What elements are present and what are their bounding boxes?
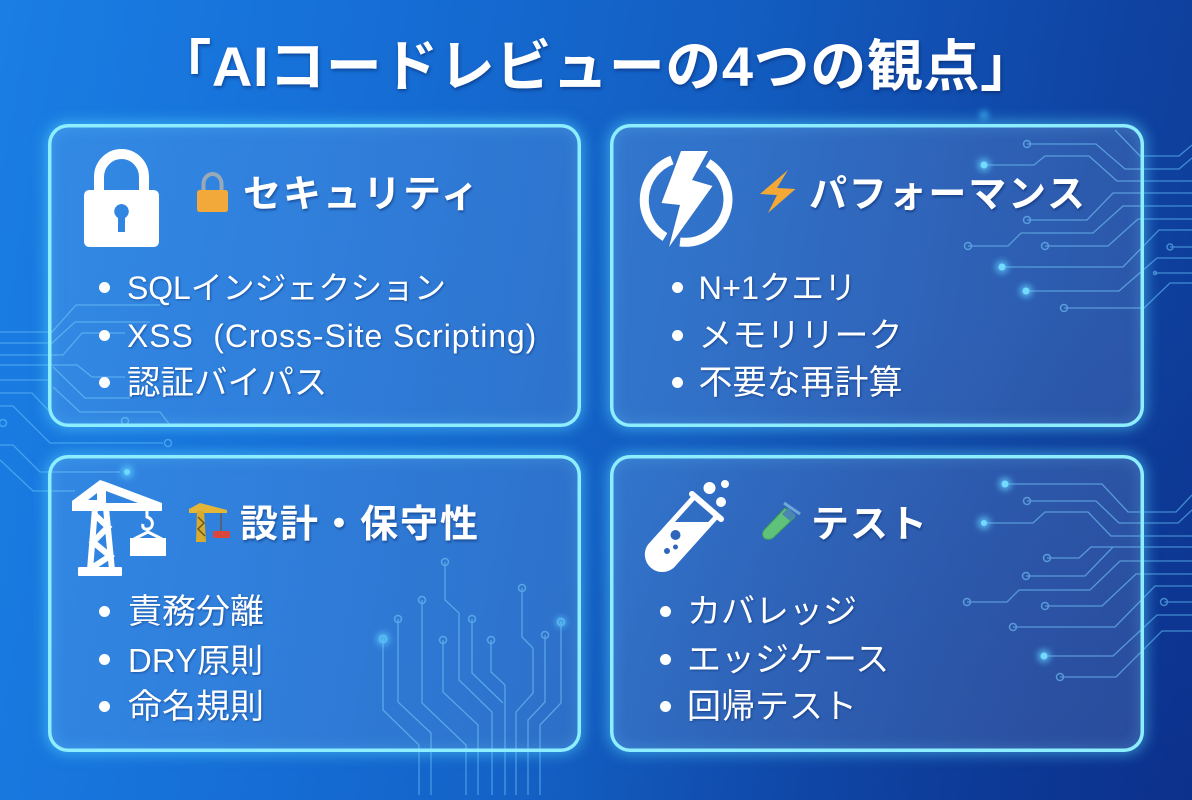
bullet list: performance: N+1クエリ [698,270,857,306]
bullet list: testing: カバレッジ [687,593,857,631]
bullet list: testing: 回帰テスト [687,688,857,726]
bullet list: design and maintainability: 命名規則 [128,688,264,726]
icon: white lightning in ring [640,151,732,247]
bullet list: performance: メモリリーク [698,316,902,354]
icon: white test tube [644,480,729,572]
icon: small green test tube [762,502,801,540]
heading: testing: テスト [811,504,928,546]
bullet list: security: SQLインジェクション [127,270,446,306]
bullet list: performance [672,270,902,402]
icon: white padlock [84,149,159,247]
panel: performance [610,124,1144,427]
bullet list: design and maintainability: DRY原則 [128,642,263,678]
bullet list: security [99,270,537,402]
title: 「AIコードレビューの4つの観点」 [155,35,1037,98]
icon: small orange padlock [197,172,228,212]
heading: security: セキュリティ [243,174,481,216]
bullet list: security: 認証バイパス [127,365,327,402]
panel: testing [610,455,1144,752]
panel: security [48,124,581,427]
icon: white crane [72,480,166,576]
bullet list: design and maintainability [99,593,264,726]
heading: performance: パフォーマンス [809,174,1087,216]
heading: design and maintainability: 設計・保守性 [240,504,480,546]
panel: design and maintainability [48,455,581,752]
bullet list: design and maintainability: 責務分離 [128,593,264,631]
bullet list: testing [660,593,889,726]
bullet list: testing: エッジケース [687,640,889,678]
icon: small orange lightning [760,170,796,213]
bullet list: performance: 不要な再計算 [698,364,902,402]
icon: small yellow crane [189,503,230,542]
bullet list: security: XSS (Cross-Site Scripting) [127,318,537,354]
